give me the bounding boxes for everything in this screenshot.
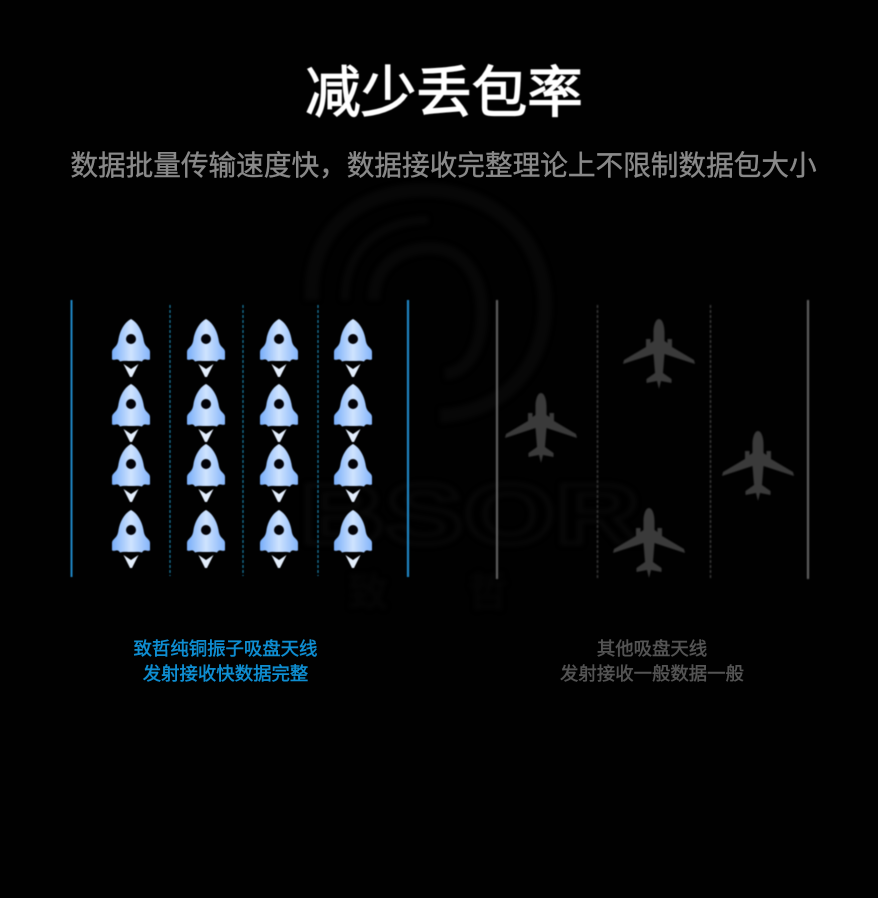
caption: planes (560, 638, 744, 684)
caption: rockets: 致哲纯铜振子吸盘天线 (134, 638, 317, 659)
background watermark logo: 致哲 (348, 571, 508, 615)
rocket grid (112, 319, 372, 568)
plane lane lines (497, 300, 808, 579)
background watermark logo: BSOR (300, 467, 640, 561)
caption: rockets: 发射接收快数据完整 (143, 663, 308, 684)
caption: planes: 发射接收一般数据一般 (560, 663, 744, 684)
planes (505, 319, 794, 578)
title: 减少丢包率 (305, 62, 583, 124)
caption: rockets (134, 638, 317, 684)
rocket lane lines (72, 300, 408, 577)
caption: planes: 其他吸盘天线 (597, 638, 707, 659)
subtitle: 数据批量传输速度快，数据接收完整理论上不限制数据包大小 (70, 150, 817, 181)
